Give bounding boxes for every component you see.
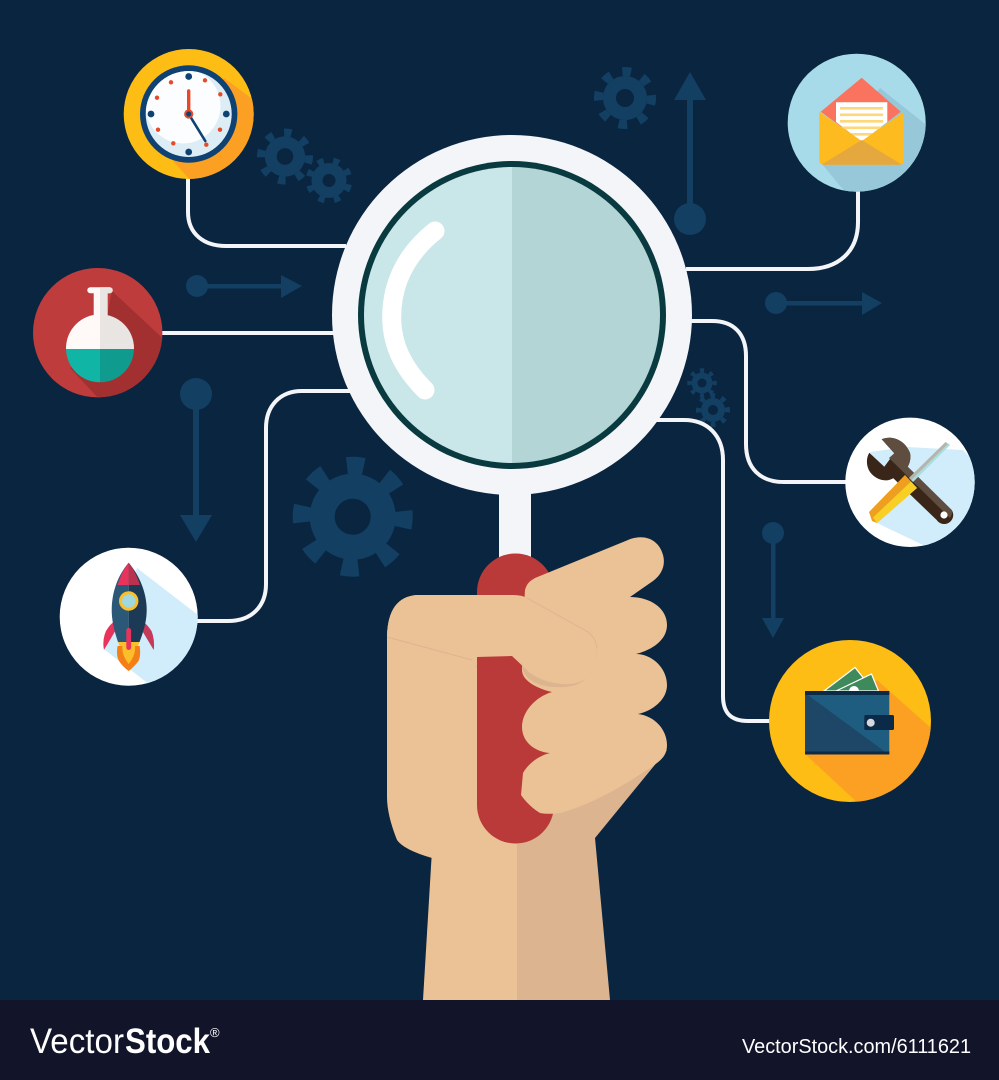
icon: wrench and screwdriver: [845, 418, 975, 547]
icon: rocket: [60, 548, 198, 686]
gear: upper left small: [303, 154, 355, 207]
arrow: down, right side: [762, 522, 784, 638]
icon: clock: [124, 49, 254, 179]
thumb: [387, 595, 597, 684]
gear: small right top: [690, 370, 714, 396]
arrow: right, right side: [765, 292, 882, 315]
footer url: VectorStock.com/6111621: [742, 1036, 971, 1058]
thumb-base gap: [472, 657, 477, 667]
magnifier handle shaft: [499, 480, 531, 570]
footer logo: [30, 1022, 220, 1061]
palm: [387, 595, 517, 858]
footer logo: Stock: [125, 1022, 210, 1061]
fingers: [521, 537, 667, 814]
thumb crease: [387, 598, 597, 660]
magnifier frame: [332, 135, 692, 495]
icon: wallet: [769, 640, 931, 802]
thumb shadow: [522, 648, 597, 687]
gear: small right bottom: [698, 396, 728, 424]
arrow: right, left side: [186, 275, 302, 298]
lens highlight: [392, 231, 435, 390]
red grip: [477, 554, 554, 843]
gear: upper left large: [258, 129, 312, 184]
icon: envelope: [788, 54, 926, 192]
footer logo: ®: [210, 1025, 220, 1040]
magnifying glass: [332, 135, 692, 570]
connector lines: [160, 178, 858, 721]
gear: top centre right: [596, 69, 654, 127]
icon: flask: [33, 268, 162, 398]
footer logo: Vector: [30, 1022, 124, 1061]
arrow: up: [674, 72, 706, 235]
arrow: down, left side: [180, 378, 212, 542]
magnifier lens: [364, 167, 512, 463]
magnifier dark ring: [358, 161, 666, 469]
forearm: [423, 840, 517, 1000]
gear: large centre left: [299, 463, 406, 570]
footer bar: [0, 1000, 999, 1080]
hand and handle grip: [387, 537, 667, 1000]
